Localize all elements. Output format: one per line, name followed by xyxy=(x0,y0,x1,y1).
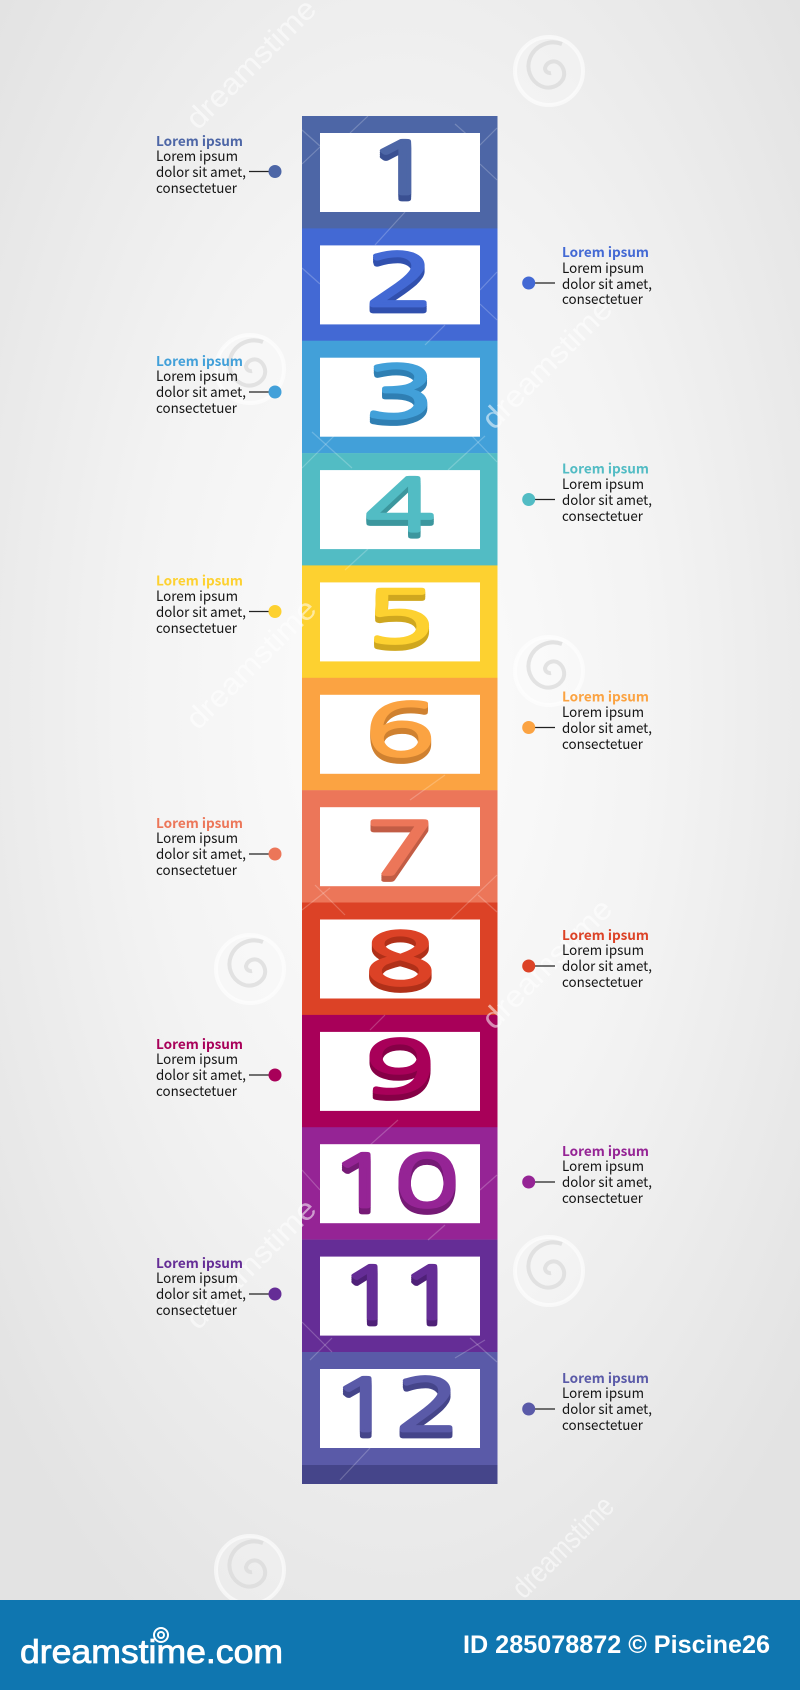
dot 7 xyxy=(268,848,282,860)
footer logo text: dreamstime.com xyxy=(20,1633,283,1670)
callout 1 xyxy=(156,130,282,198)
watermark text: dreamstime xyxy=(476,892,619,1036)
number 9: 9 xyxy=(365,1037,435,1109)
watermark text: dreamstime xyxy=(180,592,323,736)
body 11: Lorem ipsum xyxy=(156,1268,238,1288)
step 3 block xyxy=(302,341,498,453)
body 12: consectetuer xyxy=(562,1415,644,1435)
dot 3 xyxy=(268,386,282,398)
body 10: Lorem ipsum xyxy=(562,1156,644,1176)
heading 11: Lorem ipsum xyxy=(156,1252,243,1272)
body 12: Lorem ipsum xyxy=(562,1383,644,1403)
step 5 block xyxy=(302,565,498,678)
dot 8 xyxy=(522,960,535,972)
step 1 window xyxy=(320,133,480,212)
dot 5 xyxy=(268,605,282,618)
heading 6: Lorem ipsum xyxy=(562,686,649,706)
heading 10: Lorem ipsum xyxy=(562,1140,649,1160)
number 1: 1 xyxy=(365,139,437,211)
body 5: dolor sit amet, xyxy=(156,602,246,622)
step 6 window xyxy=(320,695,480,774)
number 7: 7 xyxy=(365,812,435,884)
body 1: consectetuer xyxy=(156,178,238,198)
callout 9 xyxy=(156,1033,282,1101)
dot 4 xyxy=(522,493,535,506)
number 5: 5 xyxy=(365,587,435,659)
heading 5: Lorem ipsum xyxy=(156,570,243,590)
body 6: Lorem ipsum xyxy=(562,702,644,722)
step 10 window xyxy=(320,1144,480,1223)
watermark spirals xyxy=(216,37,583,1604)
body 8: dolor sit amet, xyxy=(562,956,652,976)
body 11 xyxy=(156,1268,246,1320)
number 1: 1 xyxy=(365,137,437,209)
body 5: Lorem ipsum xyxy=(156,586,238,606)
callout 8 xyxy=(522,924,652,992)
dot 11 xyxy=(268,1288,282,1300)
callout 2 xyxy=(522,241,652,309)
step 7 block xyxy=(302,790,498,903)
heading 1: Lorem ipsum xyxy=(156,130,243,150)
dot 2 xyxy=(522,276,535,290)
step 11 block xyxy=(302,1240,498,1352)
body 1: dolor sit amet, xyxy=(156,162,246,182)
number 8: 8 xyxy=(365,925,435,997)
callout 6 xyxy=(522,686,652,754)
number 8: 8 xyxy=(365,929,435,1001)
body 10: dolor sit amet, xyxy=(562,1172,652,1192)
body 4: dolor sit amet, xyxy=(562,490,652,510)
body 3: Lorem ipsum xyxy=(156,366,238,386)
step 2 window xyxy=(320,245,480,324)
heading 12: Lorem ipsum xyxy=(562,1367,649,1387)
body 2: consectetuer xyxy=(562,289,644,309)
body 4: Lorem ipsum xyxy=(562,474,644,494)
footer logo swirl xyxy=(154,1628,168,1642)
body 9: dolor sit amet, xyxy=(156,1065,246,1085)
heading 7: Lorem ipsum xyxy=(156,812,243,832)
step 9 window xyxy=(320,1032,480,1111)
body 3 xyxy=(156,366,246,418)
body 7 xyxy=(156,828,246,880)
step 11 window xyxy=(320,1257,480,1336)
dot 6 xyxy=(522,721,535,734)
number 12: 12 xyxy=(330,1372,460,1444)
number 9: 9 xyxy=(365,1033,435,1105)
step 10 block xyxy=(302,1127,498,1240)
number 3: 3 xyxy=(365,358,435,430)
body 3: dolor sit amet, xyxy=(156,382,246,402)
footer banner xyxy=(0,1600,800,1690)
body 7: consectetuer xyxy=(156,860,238,880)
number 10: 10 xyxy=(329,1146,459,1218)
number 10: 10 xyxy=(329,1148,459,1220)
number 6: 6 xyxy=(365,700,435,772)
body 2: dolor sit amet, xyxy=(562,274,652,294)
body 5 xyxy=(156,586,246,638)
body 3: consectetuer xyxy=(156,398,238,418)
body 6: dolor sit amet, xyxy=(562,718,652,738)
body 4: consectetuer xyxy=(562,506,644,526)
step 5 window xyxy=(320,582,480,661)
step 8 block xyxy=(302,902,498,1015)
number 11: 11 xyxy=(339,1264,459,1336)
footer credit: ID 285078872 © Piscine26 xyxy=(463,1631,770,1659)
watermark text: dreamstime xyxy=(180,0,323,136)
number 9: 9 xyxy=(365,1031,435,1103)
body 9 xyxy=(156,1049,246,1101)
callout 5 xyxy=(156,570,282,638)
number 12: 12 xyxy=(330,1376,460,1448)
number 4: 4 xyxy=(365,469,435,541)
body 8: Lorem ipsum xyxy=(562,940,644,960)
body 1 xyxy=(156,146,246,198)
dot 1 xyxy=(268,165,282,178)
callout 7 xyxy=(156,812,282,880)
number 11: 11 xyxy=(339,1262,459,1334)
body 11: consectetuer xyxy=(156,1300,238,1320)
dot 10 xyxy=(522,1176,535,1188)
callout 11 xyxy=(156,1252,282,1320)
number 2: 2 xyxy=(365,250,435,322)
number 11: 11 xyxy=(339,1258,459,1330)
heading 8: Lorem ipsum xyxy=(562,924,649,944)
body 5: consectetuer xyxy=(156,618,238,638)
step 6 block xyxy=(302,678,498,790)
number 7: 7 xyxy=(365,818,435,890)
callout 10 xyxy=(522,1140,652,1208)
body 11: dolor sit amet, xyxy=(156,1284,246,1304)
number 9: 9 xyxy=(365,1035,435,1107)
body 2: Lorem ipsum xyxy=(562,258,644,278)
heading 3: Lorem ipsum xyxy=(156,350,243,370)
number 3: 3 xyxy=(365,360,435,432)
number 3: 3 xyxy=(365,362,435,434)
body 8: consectetuer xyxy=(562,972,644,992)
number 8: 8 xyxy=(365,923,435,995)
number 7: 7 xyxy=(365,816,435,888)
watermark text: dreamstime xyxy=(180,1192,323,1336)
heading 2: Lorem ipsum xyxy=(562,241,649,261)
number 7: 7 xyxy=(365,814,435,886)
watermark text: dreamstime xyxy=(476,292,619,436)
number 12: 12 xyxy=(330,1370,460,1442)
number 1: 1 xyxy=(365,133,437,205)
number 12: 12 xyxy=(330,1374,460,1446)
body 4 xyxy=(562,474,652,526)
body 12 xyxy=(562,1383,652,1435)
callout 4 xyxy=(522,458,652,526)
number 6: 6 xyxy=(365,698,435,770)
heading 9: Lorem ipsum xyxy=(156,1033,243,1053)
number 8: 8 xyxy=(365,927,435,999)
body 2 xyxy=(562,258,652,309)
body 10 xyxy=(562,1156,652,1208)
number 11: 11 xyxy=(339,1260,459,1332)
callout 12 xyxy=(522,1367,652,1435)
step 7 window xyxy=(320,807,480,886)
step 2 block xyxy=(302,228,498,341)
number 10: 10 xyxy=(329,1150,459,1222)
number 10: 10 xyxy=(329,1152,459,1224)
number 2: 2 xyxy=(365,246,435,318)
dot 12 xyxy=(522,1402,535,1416)
body 6 xyxy=(562,702,652,754)
step 3 window xyxy=(320,358,480,437)
dot 9 xyxy=(268,1068,282,1082)
number 4: 4 xyxy=(365,475,435,547)
number 2: 2 xyxy=(365,244,435,316)
body 8 xyxy=(562,940,652,992)
step 8 window xyxy=(320,920,480,998)
step 12 base shade xyxy=(302,1465,498,1484)
number 5: 5 xyxy=(365,581,435,653)
watermark text: dreamstime xyxy=(506,1490,621,1605)
number 1: 1 xyxy=(365,135,437,207)
body 9: Lorem ipsum xyxy=(156,1049,238,1069)
body 10: consectetuer xyxy=(562,1188,644,1208)
step 1 block xyxy=(302,116,498,229)
step 4 block xyxy=(302,453,498,566)
number 4: 4 xyxy=(365,473,435,545)
number 4: 4 xyxy=(365,471,435,543)
body 6: consectetuer xyxy=(562,734,644,754)
watermark text xyxy=(180,0,621,1605)
callout 3 xyxy=(156,350,282,418)
number 6: 6 xyxy=(365,694,435,766)
number 3: 3 xyxy=(365,356,435,428)
number 5: 5 xyxy=(365,583,435,655)
number 5: 5 xyxy=(365,585,435,657)
number 6: 6 xyxy=(365,696,435,768)
body 7: dolor sit amet, xyxy=(156,844,246,864)
heading 4: Lorem ipsum xyxy=(562,458,649,478)
step 12 window xyxy=(320,1369,480,1448)
body 12: dolor sit amet, xyxy=(562,1399,652,1419)
body 9: consectetuer xyxy=(156,1081,238,1101)
number 2: 2 xyxy=(365,248,435,320)
body 7: Lorem ipsum xyxy=(156,828,238,848)
step 12 block xyxy=(302,1352,498,1484)
step 9 block xyxy=(302,1015,498,1128)
step 4 window xyxy=(320,470,480,549)
body 1: Lorem ipsum xyxy=(156,146,238,166)
